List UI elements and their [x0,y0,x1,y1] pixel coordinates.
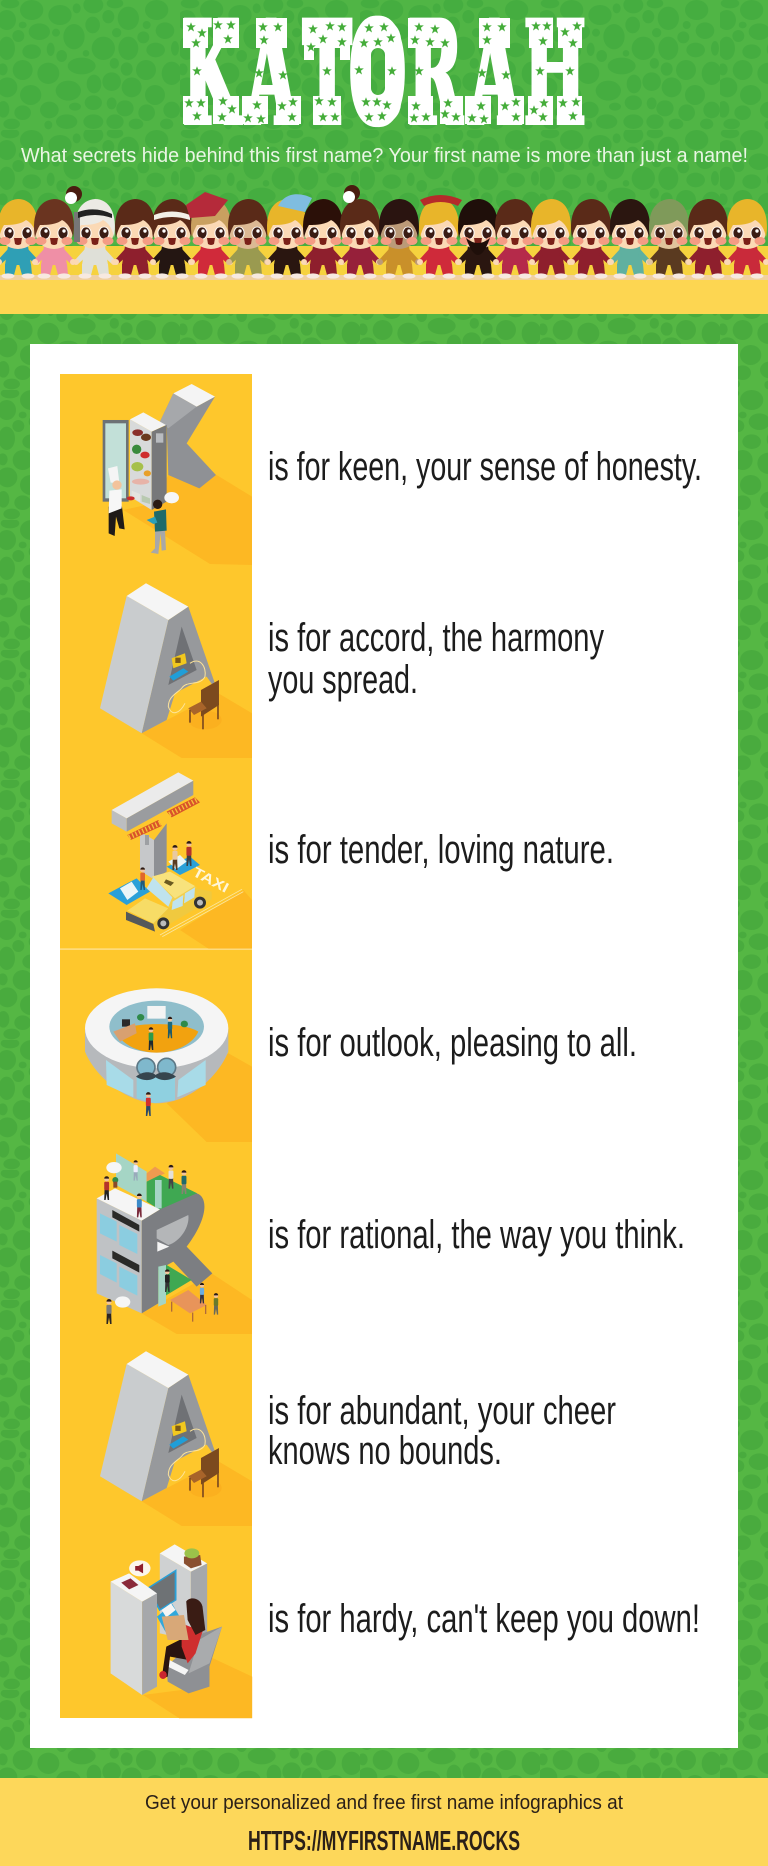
footer text: Get your personalized and free first name infographics at [145,1792,623,1814]
text: second A line 2: knows no bounds. [268,1429,502,1473]
icon: letter T with taxi [108,772,252,949]
icon: letter T with taxi: TAXI [190,864,232,896]
text: O line: is for outlook, pleasing to all. [268,1021,637,1065]
icon: letter H with desk [111,1544,252,1718]
text: T line: is for tender, loving nature. [268,828,614,872]
body background [0,314,768,1780]
subtitle: What secrets hide behind this first name? Your first name is more than just a name! [21,145,748,167]
panel: letters [30,344,738,1748]
text: second A line 1: is for abundant, your cheer [268,1389,616,1433]
footer band [0,1778,768,1866]
pale ground line [0,275,768,280]
text: A line 2: you spread. [268,658,418,702]
icon: letter A with chair [100,583,252,758]
text: A line 1: is for accord, the harmony [268,616,604,660]
character parade [0,185,768,279]
yellow ground band [0,279,768,314]
icon: letter A with chair (second) [100,1351,252,1526]
header background [0,0,768,282]
yellow illustration strip [60,374,252,1718]
icon: letter O with optician [85,988,252,1142]
footer url: HTTPS://MYFIRSTNAME.ROCKS [248,1825,520,1856]
icon: letter R with office [97,1153,252,1334]
icon: letter K with fridge [103,384,252,565]
yellow band behind characters [0,246,768,277]
tile divider [60,948,252,950]
white panel [30,344,738,1748]
